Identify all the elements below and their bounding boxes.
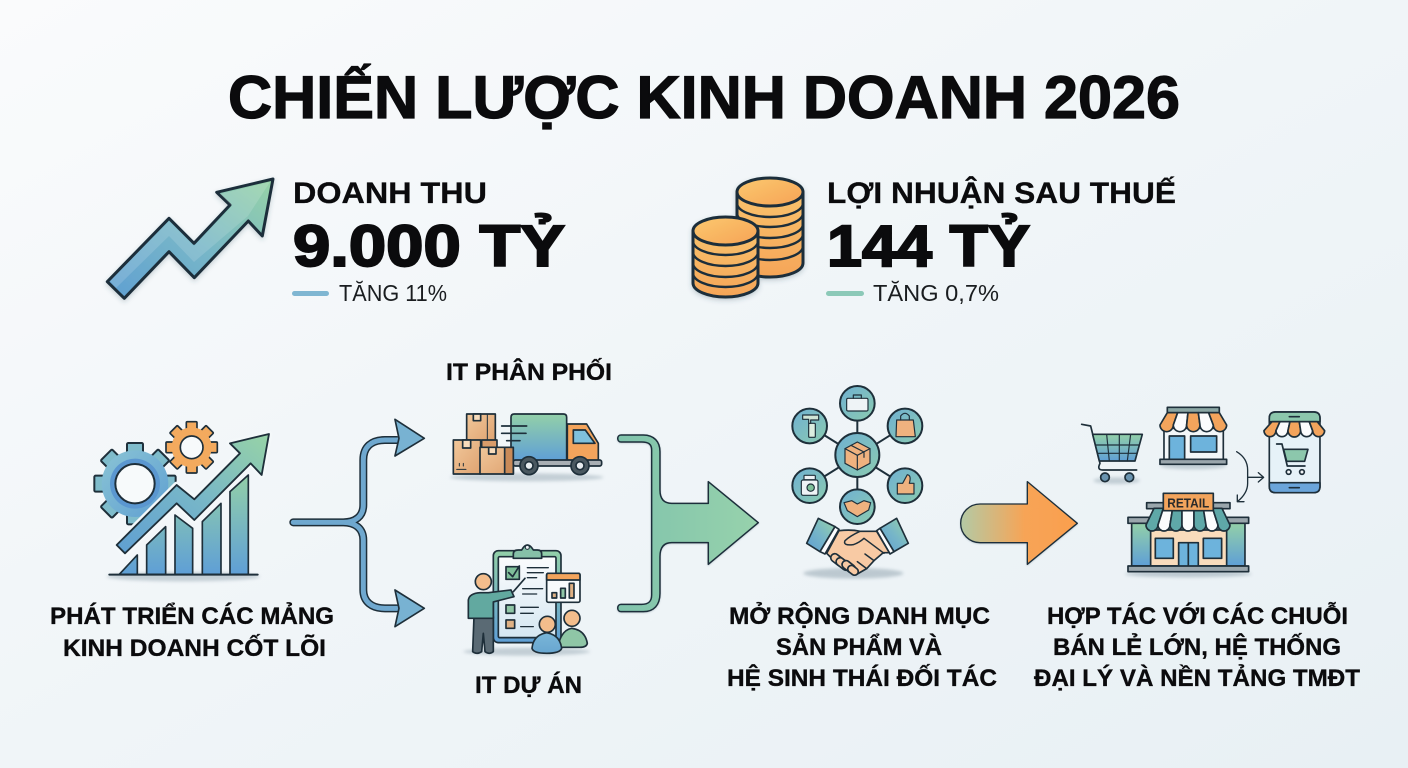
panel: retail channels [1034,407,1360,692]
shopping cart [1082,424,1142,482]
panel: core business [50,422,334,662]
retail channels label: BÁN LẺ LỚN, HỆ THỐNG [1053,632,1341,661]
icon: retail, cart and mobile shop [1082,407,1325,577]
IT distribution label: IT PHÂN PHỐI [446,358,612,386]
product ecosystem label: HỆ SINH THÁI ĐỐI TÁC [727,664,997,692]
small store [1160,407,1227,464]
retail channels label [1034,601,1360,692]
icon: gears and growth chart [94,422,269,581]
retail channels label: ĐẠI LÝ VÀ NỀN TẢNG TMĐT [1034,663,1360,692]
panel: revenue [107,177,565,306]
panel: IT projects [463,545,590,699]
panel: profit [693,176,1176,306]
arrow: orange gradient [961,482,1077,564]
revenue heading: DOANH THU [293,177,487,210]
IT projects label: IT DỰ ÁN [475,671,582,699]
profit growth marker [826,291,864,296]
revenue value: 9.000 TỶ [293,214,565,279]
retail store [1128,493,1249,572]
core business label [50,601,334,662]
mobile shop [1264,412,1325,493]
icon: boxes and truck [450,414,603,481]
retail channels label: HỢP TÁC VỚI CÁC CHUỖI [1047,601,1348,630]
arrow: split into two branches [293,419,424,627]
product ecosystem label: SẢN PHẨM VÀ [776,632,942,661]
product ecosystem label: MỞ RỘNG DANH MỤC [729,601,990,630]
core business label: PHÁT TRIỂN CÁC MẢNG [50,601,334,630]
icon: clipboard with team [463,545,590,656]
connector arrows [1237,452,1264,502]
panel: IT distribution [446,358,612,481]
handshake [807,518,908,577]
core business label: KINH DOANH CỐT LÕI [63,634,326,662]
icon: rising arrow [107,179,273,298]
product ecosystem label [727,601,997,692]
icon: coin stacks [693,178,803,297]
icon: partner network [792,386,922,579]
profit growth: TĂNG 0,7% [873,280,999,306]
arrow: merge into one [618,435,758,612]
panel: product ecosystem [727,386,997,692]
revenue growth marker [292,291,329,296]
profit value: 144 TỶ [827,214,1030,279]
profit heading: LỢI NHUẬN SAU THUẾ [827,176,1176,210]
retail sign text: RETAIL [1167,496,1210,510]
title: CHIẾN LƯỢC KINH DOANH 2026 [228,64,1180,131]
revenue growth: TĂNG 11% [339,280,447,306]
